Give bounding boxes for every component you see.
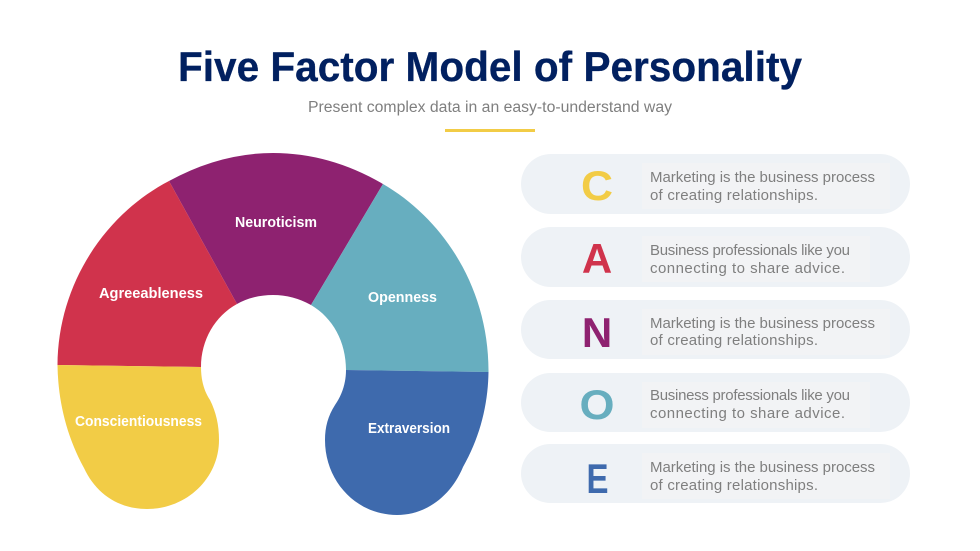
text block E: Marketing is the business process <box>650 459 875 476</box>
chart: five factor horseshoe <box>58 153 489 515</box>
panel: O row <box>521 373 910 432</box>
panel: C row <box>521 154 910 214</box>
text block C: of creating relationships. <box>650 187 818 204</box>
panel: E row <box>521 444 910 503</box>
segment: extraversion: Extraversion <box>368 421 450 437</box>
text block O: Business professionals like you <box>650 387 850 404</box>
letter N: N <box>582 309 612 356</box>
text block C: Marketing is the business process <box>650 169 875 186</box>
segment: neuroticism <box>169 153 383 305</box>
text block A: connecting to share advice. <box>650 260 845 277</box>
segment: agreeableness: Agreeableness <box>99 286 203 302</box>
text block O: connecting to share advice. <box>650 405 845 422</box>
segment: neuroticism: Neuroticism <box>235 215 317 231</box>
text block N: of creating relationships. <box>650 332 818 349</box>
segment: openness <box>311 184 489 372</box>
segment: conscientiousness <box>58 365 219 509</box>
text block E: of creating relationships. <box>650 477 818 494</box>
letter O: O <box>580 381 614 428</box>
letter E: E <box>586 455 608 502</box>
panel: A row <box>521 227 910 287</box>
letter A: A <box>582 235 612 282</box>
title: Five Factor Model of Personality <box>178 43 803 90</box>
accent rule <box>445 129 535 132</box>
panel: N row <box>521 300 910 359</box>
segment: openness: Openness <box>368 290 437 306</box>
text block N: Marketing is the business process <box>650 315 875 332</box>
segment: extraversion <box>325 370 488 515</box>
segment: agreeableness <box>58 181 237 367</box>
segment: conscientiousness: Conscientiousness <box>75 414 202 430</box>
subtitle: Present complex data in an easy-to-understand way <box>308 99 672 116</box>
text block A: Business professionals like you <box>650 242 850 259</box>
letter C: C <box>581 162 613 209</box>
